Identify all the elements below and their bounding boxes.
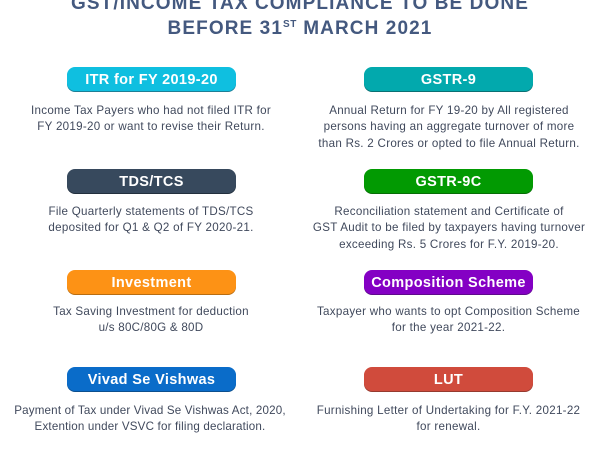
text: GSTR-9C description: GST Audit to be filed by taxpayers having turnover	[313, 221, 585, 234]
text: GSTR-9 description	[318, 104, 580, 150]
badge: LUT: LUT	[434, 372, 463, 388]
badge: GSTR-9	[364, 67, 533, 91]
text: LUT description: Furnishing Letter of Undertaking for F.Y. 2021-22	[317, 404, 580, 417]
badge: GSTR-9C: GSTR-9C	[415, 174, 482, 190]
text: GSTR-9C description: exceeding Rs. 5 Crores for F.Y. 2019-20.	[339, 238, 559, 251]
text: Investment description	[53, 305, 249, 334]
text: ITR description: Income Tax Payers who had not filed ITR for	[31, 104, 271, 117]
text: ITR description: FY 2019-20 or want to revise their Return.	[37, 120, 265, 133]
text: Investment description: Tax Saving Investment for deduction	[53, 305, 249, 318]
badge: GSTR-9: GSTR-9	[421, 72, 476, 88]
text: LUT description	[317, 404, 580, 433]
text: Composition Scheme description: Taxpayer who wants to opt Composition Scheme	[317, 305, 580, 318]
text: TDS/TCS description	[48, 205, 254, 234]
badge: Composition Scheme	[364, 270, 533, 294]
badge: ITR for FY 2019-20: ITR for FY 2019-20	[85, 72, 218, 88]
text: ITR description	[31, 104, 271, 133]
badge: GSTR-9C	[364, 169, 533, 193]
text: GSTR-9 description: persons having an aggregate turnover of more	[324, 120, 574, 133]
text: Investment description: u/s 80C/80G & 80D	[99, 321, 203, 334]
text: Vivad Se Vishwas description	[14, 404, 286, 433]
text: GSTR-9 description: Annual Return for FY 19-20 by All registered	[329, 104, 569, 117]
badge: Vivad Se Vishwas	[67, 367, 236, 391]
text: Vivad Se Vishwas description: Payment of Tax under Vivad Se Vishwas Act, 2020,	[14, 404, 286, 417]
text: TDS/TCS description: deposited for Q1 & Q2 of FY 2020-21.	[48, 221, 254, 234]
badge: ITR for FY 2019-20	[67, 67, 236, 91]
text: TDS/TCS description: File Quarterly statements of TDS/TCS	[48, 205, 254, 218]
text: GSTR-9C description	[313, 205, 585, 251]
badge: TDS/TCS	[67, 169, 236, 193]
badge: TDS/TCS: TDS/TCS	[119, 174, 184, 190]
text: GSTR-9C description: Reconciliation statement and Certificate of	[334, 205, 564, 218]
badge: Investment: Investment	[111, 275, 192, 291]
badge: Vivad Se Vishwas: Vivad Se Vishwas	[88, 372, 215, 388]
badge: Investment	[67, 270, 236, 294]
text: Composition Scheme description	[317, 305, 580, 334]
title: BEFORE 31ST MARCH 2021	[168, 18, 432, 39]
badge: Composition Scheme: Composition Scheme	[371, 275, 526, 291]
text: Composition Scheme description: for the year 2021-22.	[392, 321, 505, 334]
text: GSTR-9 description: than Rs. 2 Crores or opted to file Annual Return.	[318, 137, 580, 150]
text: Vivad Se Vishwas description: Extention under VSVC for filing declaration.	[35, 420, 265, 433]
text: LUT description: for renewal.	[417, 420, 480, 433]
title	[71, 0, 529, 39]
badge: LUT	[364, 367, 533, 391]
